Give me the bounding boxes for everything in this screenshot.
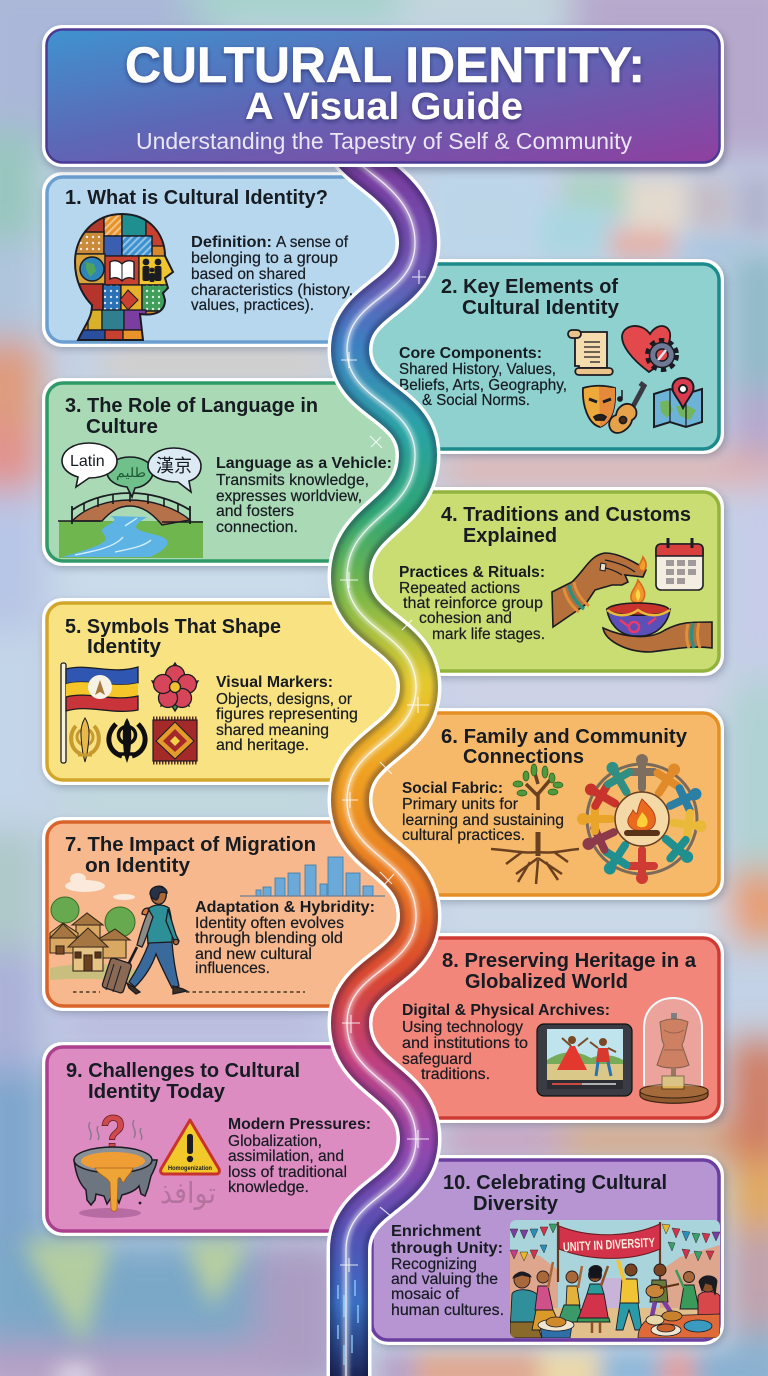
panel: 10 Celebrating Diversity: [368, 1155, 726, 1347]
heading 5: 5. Symbols That Shape: [65, 615, 281, 638]
food tables: [538, 1311, 720, 1338]
heading 7: on Identity: [85, 854, 191, 877]
icon: carpet: [153, 718, 197, 763]
text block 1: A sense of: [276, 234, 349, 251]
panel: 8 Preserving Heritage: [372, 933, 730, 1128]
text block 10: mosaic of: [391, 1286, 460, 1303]
text block 5: [216, 674, 358, 754]
card background 5: [40, 598, 396, 791]
text block 3: and fosters: [216, 503, 294, 520]
text block 9: Globalization,: [228, 1133, 322, 1150]
heading 3: [65, 394, 318, 438]
heading 3: Culture: [86, 415, 158, 438]
icon: gold emblem: [71, 718, 99, 762]
heading 8: 8. Preserving Heritage in a: [442, 949, 697, 972]
icon: museum bell jar with garment: [640, 998, 708, 1103]
card background 3: [40, 378, 396, 572]
icon: community circle around fire: [577, 754, 708, 884]
card background 2: [372, 259, 730, 460]
text block 4: [399, 564, 545, 643]
icon: melting pot with question mark: [74, 1105, 157, 1218]
text block 3: [216, 455, 392, 536]
heading 2: 2. Key Elements of: [441, 275, 618, 298]
card background 8: [372, 933, 730, 1128]
icon: clouds: [65, 873, 135, 900]
text block 9: assimilation, and: [228, 1148, 344, 1165]
text block 5: Objects, designs, or: [216, 691, 353, 708]
text block 8: and institutions to: [402, 1035, 528, 1052]
text block 2: Shared History, Values,: [399, 361, 556, 378]
icon: tablet with dancers: [537, 1024, 632, 1096]
panel: 1 What is Cultural Identity: [40, 172, 396, 352]
banner: [558, 1222, 660, 1282]
text block 9: Modern Pressures:: [228, 1116, 371, 1133]
text block 7: and new cultural: [195, 946, 312, 963]
card background 9: [40, 1042, 396, 1242]
icon: hand lighting: [552, 553, 646, 627]
heading 7: [65, 833, 316, 877]
heading 8: [442, 949, 697, 993]
illustration: village with trees: [50, 897, 136, 984]
text block 7: [195, 899, 375, 977]
heading 6: 6. Family and Community: [441, 725, 688, 748]
icon: diya lamp and open hand: [603, 580, 712, 652]
icon: speech bubbles: [62, 443, 201, 497]
heading 6: Connections: [463, 745, 584, 768]
text block 8: Digital & Physical Archives:: [402, 1002, 610, 1019]
heading 4: 4. Traditions and Customs: [441, 503, 691, 526]
banner: UNITY IN DIVERSITY: [563, 1235, 656, 1254]
text block 2: Beliefs, Arts, Geography,: [399, 377, 567, 394]
text block 3: expresses worldview,: [216, 488, 362, 505]
title: A Visual Guide: [245, 86, 523, 128]
icon: city skyline: [240, 857, 385, 896]
text block 5: shared meaning: [216, 722, 329, 739]
rainbow ribbon path: [338, 150, 429, 1376]
heading 8: Globalized World: [465, 970, 628, 993]
text block 2: [399, 345, 567, 409]
icon: calendar: [656, 538, 703, 590]
card background 7: [40, 817, 396, 1016]
faded arabic script: توافذ: [160, 1178, 216, 1211]
text block 3: Transmits knowledge,: [216, 472, 369, 489]
panel: 2 Key Elements: [372, 259, 730, 460]
heading 9: Identity Today: [88, 1080, 226, 1103]
text block 1: values, practices).: [191, 297, 314, 314]
text block 9: [228, 1116, 371, 1196]
text block 2: & Social Norms.: [422, 392, 530, 409]
panel: 4 Traditions and Customs: [372, 487, 730, 682]
text block 7: Adaptation & Hybridity:: [195, 899, 375, 916]
panel: 9 Challenges: [40, 1042, 396, 1242]
heading 1: 1. What is Cultural Identity?: [65, 186, 328, 209]
text block 9: knowledge.: [228, 1179, 309, 1196]
icon: mosaic head: [74, 213, 174, 341]
text block 4: mark life stages.: [432, 626, 545, 643]
icon: speech bubbles: Latin: [70, 453, 105, 470]
text block 3: connection.: [216, 519, 298, 536]
text block 7: Identity often evolves: [195, 915, 344, 932]
heading 5: [65, 615, 281, 658]
text block 6: Primary units for: [402, 796, 519, 813]
card background 6: [372, 708, 730, 906]
text block 5: figures representing: [216, 706, 358, 723]
bunting: [510, 1224, 720, 1261]
text block 1: belonging to a group: [191, 250, 338, 267]
text block 10: through Unity:: [391, 1240, 503, 1257]
heading 9: 9. Challenges to Cultural: [66, 1059, 300, 1082]
text block 6: [402, 780, 564, 844]
heading 5: Identity: [87, 635, 162, 658]
subtitle: Understanding the Tapestry of Self & Community: [136, 128, 632, 154]
heading 6: [441, 725, 688, 768]
text block 8: traditions.: [421, 1066, 490, 1083]
icon: black emblem: [109, 718, 145, 763]
heading 7: 7. The Impact of Migration: [65, 833, 316, 856]
text block 7: influences.: [195, 960, 270, 977]
heading 2: Cultural Identity: [462, 296, 620, 319]
heading 2: [441, 275, 620, 319]
icon: mask and guitar: [583, 383, 644, 433]
heading 10: Diversity: [473, 1192, 559, 1215]
heading 10: 10. Celebrating Cultural: [443, 1171, 667, 1194]
text block 1: based on shared: [191, 266, 306, 283]
text block 10: human cultures.: [391, 1302, 504, 1319]
text block 4: Repeated actions: [399, 580, 520, 597]
text block 10: and valuing the: [391, 1271, 498, 1288]
icon: tree and roots: [491, 764, 579, 884]
text block 8: Using technology: [402, 1019, 523, 1036]
card background 4: [372, 487, 730, 682]
text block 6: cultural practices.: [402, 827, 525, 844]
heading 10: [443, 1171, 667, 1215]
heading 4: Explained: [463, 524, 557, 547]
text block 5: and heritage.: [216, 737, 309, 754]
text block 4: that reinforce group: [403, 595, 543, 612]
panel: 3 Role of Language: [40, 378, 396, 572]
text block 1: characteristics (history,: [191, 282, 353, 299]
text block 10: [391, 1223, 504, 1319]
header banner: [42, 25, 726, 171]
text block 4: cohesion and: [419, 610, 512, 627]
icon: warning triangle: Homogenization: [168, 1166, 212, 1172]
dancers and musicians: [510, 1260, 720, 1338]
dashed ground line: [73, 991, 305, 993]
panel: 6 Family and Community: [372, 708, 730, 906]
icon: flag: [61, 663, 138, 763]
text block 7: through blending old: [195, 930, 343, 947]
icon: scroll: [568, 330, 613, 375]
icon: melting pot with question mark: ?: [100, 1105, 126, 1161]
text block 6: learning and sustaining: [402, 812, 564, 829]
title: [125, 37, 645, 128]
icon: walking traveler: [102, 886, 187, 994]
panel: 7 Impact of Migration: [40, 817, 396, 1016]
text block 3: Language as a Vehicle:: [216, 455, 392, 472]
text block 8: safeguard: [402, 1051, 472, 1068]
title: CULTURAL IDENTITY:: [125, 37, 645, 93]
text block 8: [402, 1002, 610, 1083]
text block 4: Practices & Rituals:: [399, 564, 545, 581]
icon: speech bubbles: طليم: [116, 465, 146, 481]
heading 3: 3. The Role of Language in: [65, 394, 318, 417]
text block 10: Enrichment: [391, 1223, 482, 1240]
panel: 5 Symbols: [40, 598, 396, 791]
text block 9: loss of traditional: [228, 1164, 347, 1181]
illustration: stone bridge over river: [58, 493, 203, 558]
icon: map and pin: [654, 378, 702, 427]
text block 6: Social Fabric:: [402, 780, 503, 797]
card background 1: [40, 172, 396, 352]
icon: flower: [152, 663, 198, 711]
text block 2: Core Components:: [399, 345, 542, 362]
heading 9: [66, 1059, 300, 1103]
illustration: festival scene: [510, 1220, 720, 1338]
text block 10: Recognizing: [391, 1256, 477, 1273]
text block 1: [191, 234, 353, 314]
heading 4: [441, 503, 691, 547]
icon: warning triangle: [161, 1120, 219, 1174]
card background 10: [368, 1155, 726, 1347]
text block 1: Definition:: [191, 234, 272, 251]
text block 5: Visual Markers:: [216, 674, 333, 691]
icon: heart and gear: [622, 326, 676, 372]
icon: speech bubbles: 漢京: [156, 456, 192, 476]
